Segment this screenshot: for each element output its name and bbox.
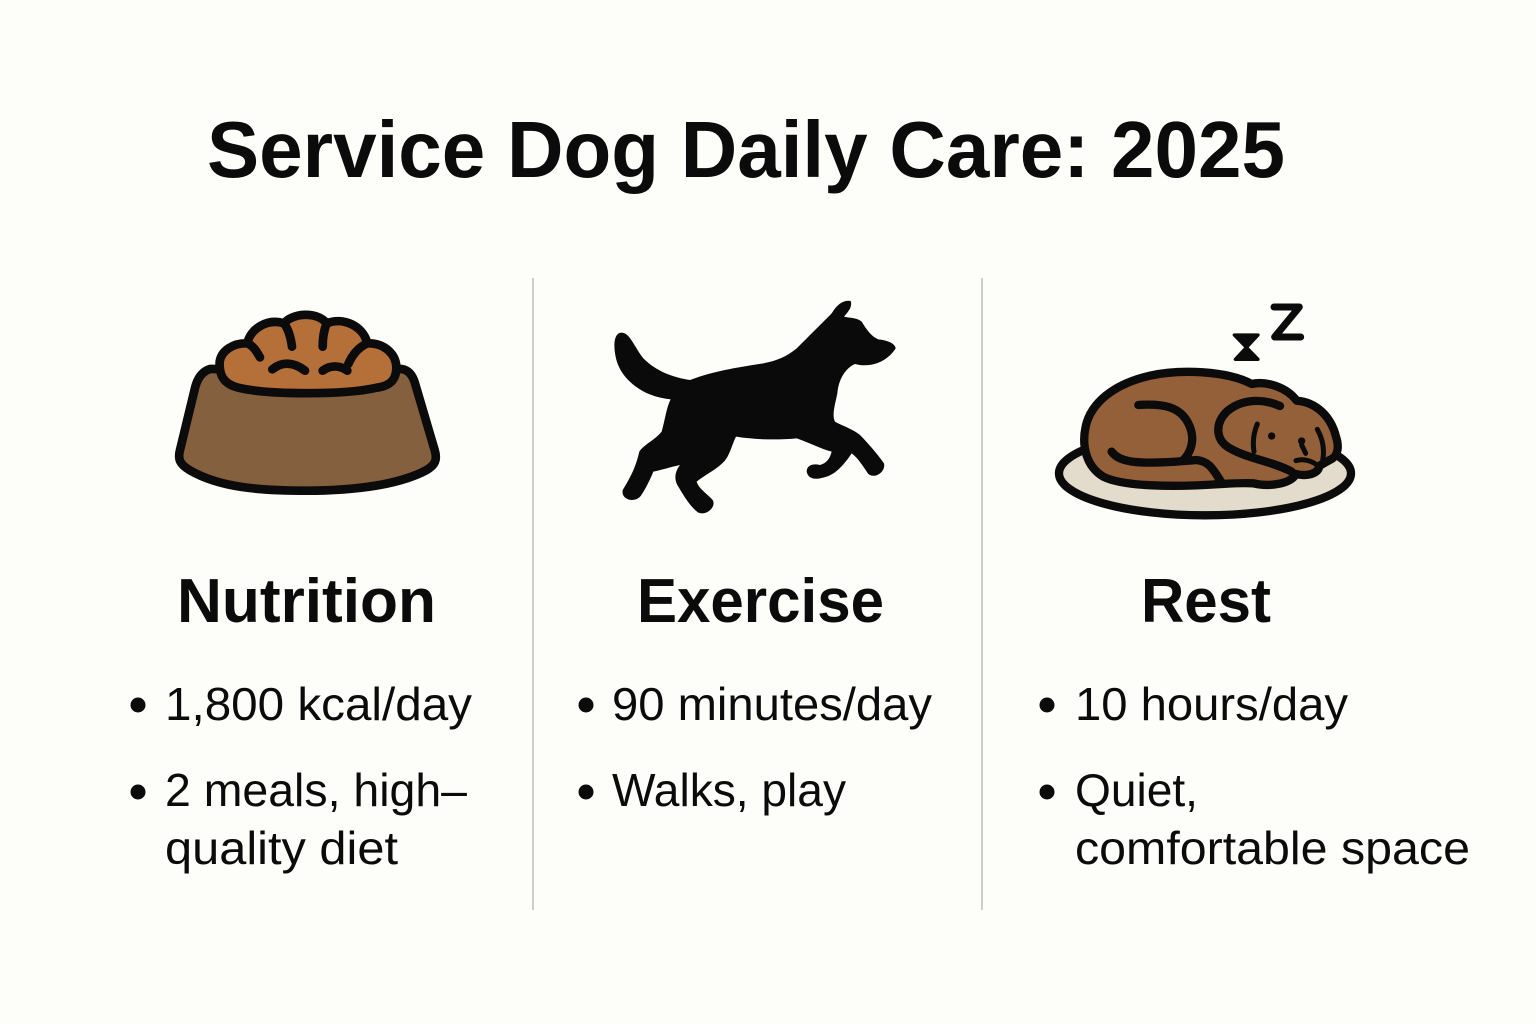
list: nutrition facts (130, 678, 472, 874)
title: Service Dog Daily Care: 2025 (207, 105, 1285, 194)
list: nutrition facts: 2 meals, high– (165, 764, 467, 816)
list: exercise facts: Walks, play (612, 764, 846, 816)
list: exercise facts (578, 678, 932, 816)
list: nutrition facts: 1,800 kcal/day (165, 678, 472, 730)
heading: exercise: Exercise (637, 567, 884, 636)
icon: running dog (614, 301, 896, 513)
panel: rest (1040, 307, 1470, 874)
list: rest facts: Quiet, (1075, 764, 1198, 816)
list: rest facts: comfortable space (1075, 822, 1470, 874)
icon: sleeping dog (1059, 307, 1351, 515)
list: rest facts (1040, 678, 1470, 874)
list: exercise facts: 90 minutes/day (612, 678, 932, 730)
list: nutrition facts: quality diet (165, 822, 398, 874)
list: rest facts: 10 hours/day (1075, 678, 1348, 730)
panel: nutrition (130, 315, 472, 874)
heading: rest: Rest (1141, 567, 1271, 636)
panel: exercise (578, 301, 932, 816)
heading: nutrition: Nutrition (177, 567, 436, 636)
icon: food bowl (179, 315, 436, 491)
